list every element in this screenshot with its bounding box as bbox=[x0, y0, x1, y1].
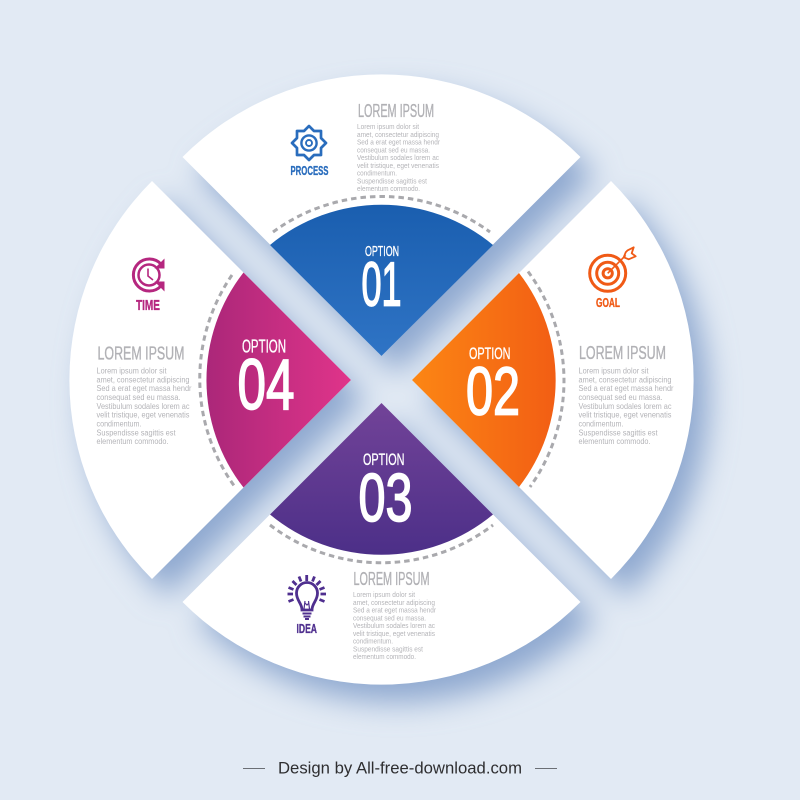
body text bottom: Sed a erat eget massa hendr bbox=[353, 608, 437, 614]
body text right: amet, consectetur adipiscing bbox=[578, 375, 672, 384]
body text right: consequat sed eu massa. bbox=[578, 393, 662, 402]
body text top: Sed a erat eget massa hendr bbox=[357, 140, 441, 146]
body text bottom: consequat sed eu massa. bbox=[353, 615, 426, 622]
body text left: Vestibulum sodales lorem ac bbox=[96, 402, 190, 411]
heading bottom: LOREM IPSUM bbox=[354, 569, 430, 589]
body text bottom: Vestibulum sodales lorem ac bbox=[353, 623, 435, 630]
body text left: elementum commodo. bbox=[96, 437, 168, 446]
heading left: LOREM IPSUM bbox=[98, 343, 184, 363]
body text bottom: Lorem ipsum dolor sit bbox=[353, 592, 415, 599]
body text right: Lorem ipsum dolor sit bbox=[578, 366, 649, 376]
panel: idea (bottom) bbox=[182, 403, 580, 685]
number 02: 02 bbox=[466, 354, 520, 430]
number 01: 01 bbox=[362, 250, 402, 320]
body text left: consequat sed eu massa. bbox=[96, 393, 180, 402]
body text top: Suspendisse sagittis est bbox=[357, 178, 427, 185]
body text left bbox=[96, 366, 192, 446]
blue wedge bbox=[270, 205, 493, 356]
body text left: Sed a erat eget massa hendr bbox=[96, 384, 192, 393]
body text left: velit tristique, eget venenatis bbox=[96, 411, 190, 420]
pink wedge bbox=[206, 272, 351, 488]
icon: target bbox=[590, 247, 636, 291]
body text top: Lorem ipsum dolor sit bbox=[357, 124, 419, 131]
white sector bottom bbox=[182, 403, 580, 685]
heading top: LOREM IPSUM bbox=[358, 101, 434, 121]
white sector left bbox=[69, 181, 351, 579]
body text right: Sed a erat eget massa hendr bbox=[578, 384, 674, 393]
body text right: Suspendisse sagittis est bbox=[578, 428, 658, 437]
body text left: Suspendisse sagittis est bbox=[96, 428, 176, 437]
option 04 label: OPTION bbox=[242, 336, 286, 356]
body text left: Lorem ipsum dolor sit bbox=[96, 366, 167, 376]
body text bottom bbox=[353, 592, 437, 661]
body text top: Vestibulum sodales lorem ac bbox=[357, 155, 439, 162]
body text top: consequat sed eu massa. bbox=[357, 147, 430, 154]
option 02 label: OPTION bbox=[469, 344, 510, 363]
panel: goal (right) bbox=[412, 181, 694, 579]
body text bottom: Suspendisse sagittis est bbox=[353, 646, 423, 653]
goal label: GOAL bbox=[596, 295, 620, 310]
dashed arc left bbox=[200, 275, 235, 487]
body text bottom: elementum commodo. bbox=[353, 654, 416, 661]
body text right: Vestibulum sodales lorem ac bbox=[578, 402, 672, 411]
body text top: elementum commodo. bbox=[357, 186, 420, 193]
dashed arc top bbox=[273, 196, 490, 232]
panel: time (left) bbox=[69, 181, 351, 579]
option 01 label: OPTION bbox=[365, 243, 399, 260]
body text bottom: amet, consectetur adipiscing bbox=[353, 600, 435, 607]
body text right: velit tristique, eget venenatis bbox=[578, 411, 672, 420]
white sector right bbox=[412, 181, 694, 579]
icon: light bulb bbox=[288, 575, 326, 619]
body text left: condimentum. bbox=[96, 420, 142, 429]
body text top: amet, consectetur adipiscing bbox=[357, 132, 439, 139]
dashed arc bottom bbox=[270, 525, 493, 563]
purple wedge bbox=[270, 403, 493, 555]
footer credit: Design by All-free-download.com bbox=[278, 758, 522, 778]
body text bottom: velit tristique, eget venenatis bbox=[353, 631, 435, 638]
body text top: condimentum. bbox=[357, 170, 397, 178]
body text right: condimentum. bbox=[578, 420, 624, 429]
body text right bbox=[578, 366, 674, 446]
icon: clock with arrows bbox=[133, 258, 164, 292]
process label: PROCESS bbox=[290, 164, 328, 178]
white sector top bbox=[182, 74, 580, 356]
number 03: 03 bbox=[358, 460, 412, 536]
panel: process (top) bbox=[182, 74, 580, 356]
body text bottom: condimentum. bbox=[353, 638, 393, 646]
body text right: elementum commodo. bbox=[578, 437, 650, 446]
time label: TIME bbox=[136, 297, 160, 314]
body text left: amet, consectetur adipiscing bbox=[96, 375, 190, 384]
idea label: IDEA bbox=[296, 621, 317, 636]
option 03 label: OPTION bbox=[363, 450, 404, 469]
heading right: LOREM IPSUM bbox=[579, 343, 666, 363]
drop shadows of the sectors bbox=[84, 92, 709, 703]
number 04: 04 bbox=[238, 346, 294, 425]
body text top: velit tristique, eget venenatis bbox=[357, 163, 439, 170]
icon: gear bbox=[292, 126, 326, 160]
dashed arc right bbox=[528, 272, 564, 487]
body text top bbox=[357, 124, 441, 193]
orange wedge bbox=[412, 273, 556, 487]
